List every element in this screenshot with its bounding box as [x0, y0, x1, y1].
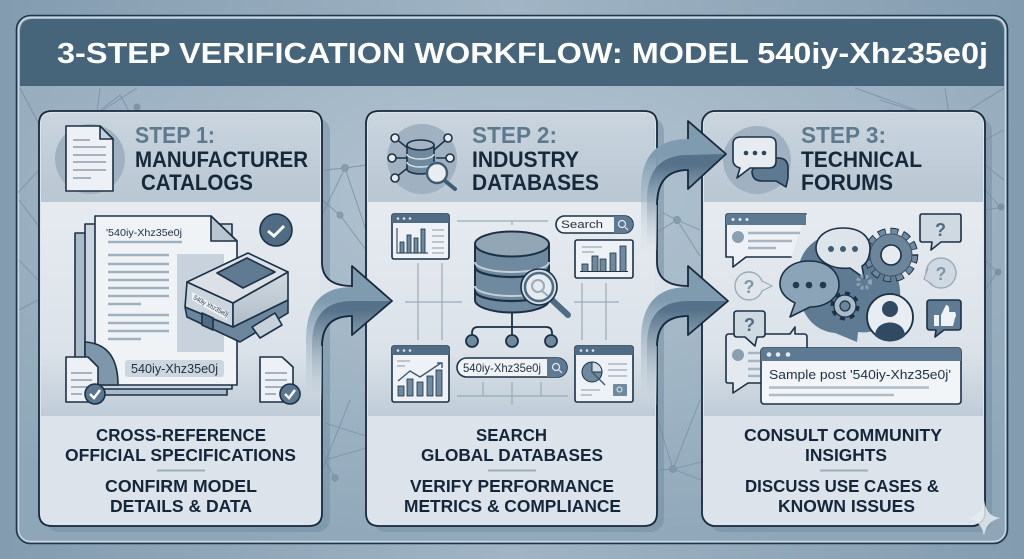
document stack: 540iy-Xhz35e0j	[131, 362, 218, 376]
search box	[556, 216, 633, 233]
light speech bubble	[816, 228, 870, 278]
step 3 description: DISCUSS USE CASES &	[745, 476, 939, 496]
model search box: 540iy-Xhz35e0j	[463, 361, 541, 375]
device illustration: 540iy Xhz35e0j	[192, 295, 229, 319]
background network pattern	[0, 88, 1004, 481]
icon: chat bubbles in circle	[723, 126, 791, 194]
step 1 description	[65, 425, 296, 516]
panel 2 header band	[368, 113, 655, 202]
central speech blob	[797, 233, 900, 342]
model search box	[457, 358, 567, 377]
step 2 heading	[472, 122, 599, 195]
arrow: step 2 to step 3 lower	[641, 266, 728, 405]
step 1 description: CROSS-REFERENCE	[96, 425, 266, 445]
thumbs-up bubble	[927, 300, 961, 337]
step 2 description	[404, 425, 621, 516]
document stack	[75, 216, 237, 395]
icon: sparkle watermark	[966, 500, 1001, 536]
step 2 heading: INDUSTRY	[472, 147, 579, 172]
step 2 description: METRICS & COMPLIANCE	[404, 496, 621, 516]
step 3 description: KNOWN ISSUES	[778, 496, 915, 516]
step 2 description: SEARCH	[476, 425, 547, 445]
question bubble small: ?	[744, 315, 755, 335]
panel 1 body	[41, 202, 320, 416]
faded question bubble left	[735, 272, 772, 300]
panel 3 body	[704, 202, 983, 416]
step 2 heading: STEP 2:	[472, 122, 557, 148]
arrow: step 2 to step 3 upper	[641, 121, 726, 250]
step 1 description: DETAILS & DATA	[110, 496, 252, 516]
step 1 description: CONFIRM MODEL	[105, 476, 257, 496]
forum post bubble top left	[726, 214, 806, 267]
step 1 heading: CATALOGS	[141, 170, 253, 195]
panel: step 3 technical forums	[702, 111, 985, 526]
title banner: 3-STEP VERIFICATION WORKFLOW: MODEL 540iy-Xhz35e0j	[57, 38, 988, 70]
small document left with check	[66, 357, 105, 404]
faded question bubble right	[924, 258, 956, 288]
sample post window	[761, 348, 961, 404]
title banner	[20, 19, 1004, 86]
mid speech bubble	[780, 261, 839, 317]
panel: step 2 industry databases	[366, 111, 688, 526]
faded question bubble right: ?	[936, 264, 946, 284]
lower forum bubble	[726, 327, 807, 393]
search box: Search	[561, 219, 603, 231]
step 1 heading	[135, 122, 308, 195]
window: pie chart	[575, 346, 633, 402]
question bubble top right	[920, 214, 961, 250]
window: trend chart	[392, 346, 449, 402]
connector lines	[405, 221, 619, 405]
small gears	[832, 276, 870, 318]
device illustration	[185, 253, 288, 342]
icon: database network in circle	[387, 124, 457, 194]
step 3 heading: TECHNICAL	[801, 147, 922, 172]
step 1 heading: MANUFACTURER	[135, 147, 308, 172]
step 3 description: CONSULT COMMUNITY	[744, 425, 942, 445]
window: bar chart right	[575, 240, 633, 278]
panel 2 body	[368, 202, 655, 416]
step 3 description	[744, 425, 942, 516]
document stack: '540iy-Xhz35e0j	[106, 227, 182, 239]
faded question bubble left: ?	[744, 277, 754, 297]
panel 3 header band	[704, 113, 983, 202]
question bubble top right: ?	[935, 220, 946, 240]
icon: top check badge	[260, 214, 292, 246]
panel 1 header band	[41, 113, 320, 202]
step 2 description: VERIFY PERFORMANCE	[410, 476, 614, 496]
large gear	[868, 232, 914, 278]
icon: document in circle	[55, 124, 125, 194]
arrow: step 1 to step 2	[306, 266, 392, 400]
big database icon with magnifier	[475, 232, 568, 315]
panel: step 1 manufacturer catalogs	[39, 111, 352, 526]
step 3 heading: STEP 3:	[801, 122, 886, 148]
step 3 heading	[801, 122, 922, 195]
step 1 heading: STEP 1:	[135, 122, 215, 148]
database tree connector	[466, 312, 557, 347]
user avatar	[867, 294, 913, 342]
step 3 description: INSIGHTS	[805, 445, 887, 465]
sample post window: Sample post '540iy-Xhz35e0j'	[769, 367, 951, 382]
small document right with check	[260, 357, 300, 404]
panel shadows	[46, 118, 992, 532]
step 3 heading: FORUMS	[801, 170, 893, 195]
window: bar chart top left	[392, 214, 449, 259]
step 2 heading: DATABASES	[472, 170, 599, 195]
step 2 description: GLOBAL DATABASES	[421, 445, 603, 465]
question bubble small	[734, 311, 765, 346]
step 1 description: OFFICIAL SPECIFICATIONS	[65, 445, 296, 465]
